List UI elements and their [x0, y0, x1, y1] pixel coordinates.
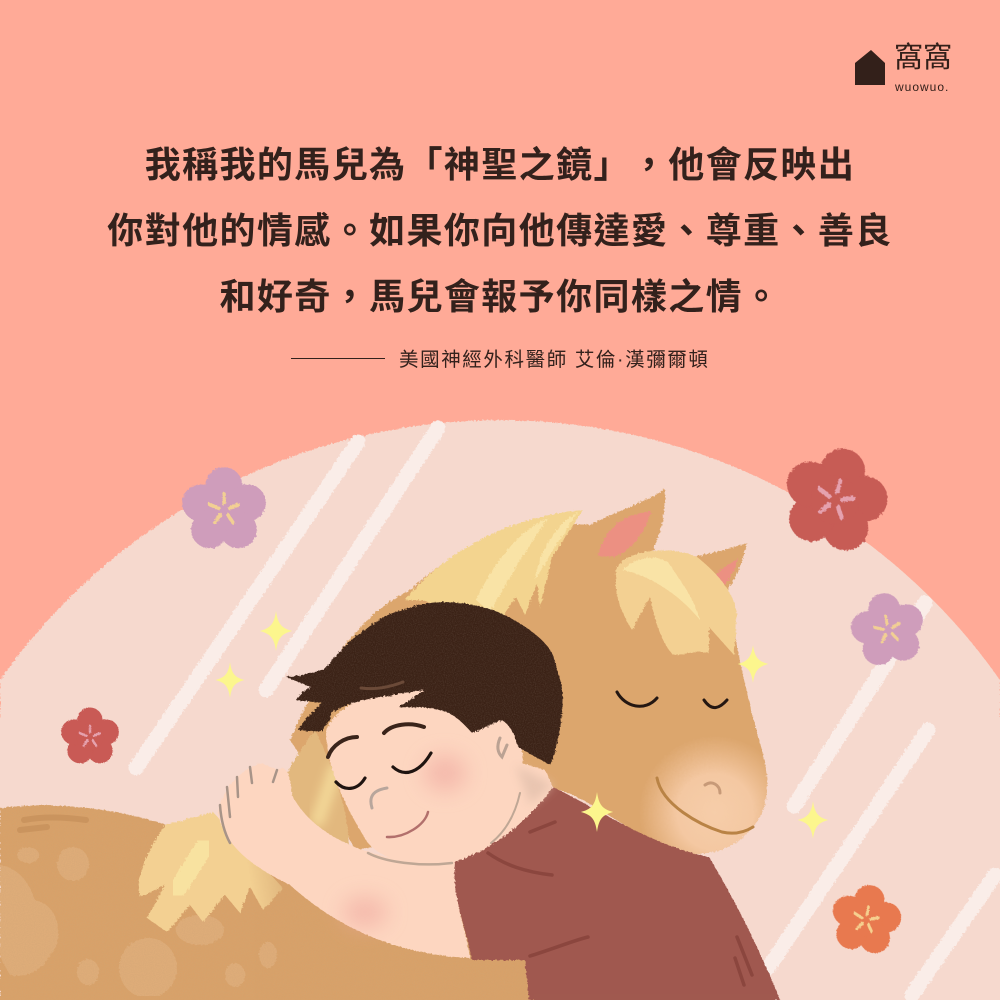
attribution text: 美國神經外科醫師 艾倫·漢彌爾頓: [399, 349, 710, 371]
light diagonal stripes: [136, 428, 995, 995]
quote line 3: 和好奇，馬兒會報予你同樣之情。: [219, 276, 780, 317]
boy hair: [286, 602, 563, 765]
logo name: 窩窩: [894, 42, 952, 74]
horse body wrinkles: [20, 817, 86, 830]
horse head and neck: [290, 488, 768, 854]
hair grain: [280, 600, 570, 770]
arch background: [0, 420, 1000, 1000]
flower: orange bottom right: [827, 879, 906, 957]
horse tail mane: [138, 812, 283, 932]
horse mouth and nostril: [657, 778, 753, 833]
flower: purple right: [846, 587, 929, 669]
hair highlight strand: [361, 682, 403, 689]
boy blush: [343, 755, 466, 927]
boy arm and hand: [218, 763, 470, 958]
flower: purple top left: [182, 467, 266, 548]
horse muzzle: [644, 742, 768, 854]
boy head, neck and ear: [326, 687, 553, 865]
flower: red top right: [773, 436, 898, 558]
quote: [107, 144, 893, 317]
illustration: boy hugging horse: [0, 419, 1000, 1000]
neck shadow: [516, 765, 553, 805]
quote line 2: 你對他的情感。如果你向他傳達愛、尊重、善良: [107, 210, 893, 251]
horse body bottom fill: [0, 996, 560, 1000]
blond mane behind boy: [285, 730, 349, 855]
arch base fill: [0, 720, 1000, 1000]
sparkles: [216, 611, 828, 839]
attribution rule: [291, 358, 385, 359]
flower: red left: [61, 708, 119, 763]
face features: [220, 724, 520, 864]
shirt creases: [488, 822, 752, 985]
logo house icon: [855, 50, 885, 85]
logo: [855, 42, 952, 94]
horse neck mane: [405, 510, 737, 655]
blond mane highlight: [318, 770, 335, 820]
logo latin name: wuowuo.: [895, 80, 949, 94]
horse forelock: [615, 550, 737, 655]
quote line 1: 我稱我的馬兒為「神聖之鏡」，他會反映出: [145, 144, 855, 185]
horse eyes: [617, 692, 727, 708]
horse body grain: [0, 806, 154, 996]
boy shirt: [454, 787, 780, 1000]
horse inner ears: [598, 511, 738, 585]
shirt bottom fill: [534, 994, 774, 1000]
horse body: [0, 805, 600, 1000]
horse body spots: [0, 847, 277, 998]
tail highlight: [175, 843, 207, 893]
